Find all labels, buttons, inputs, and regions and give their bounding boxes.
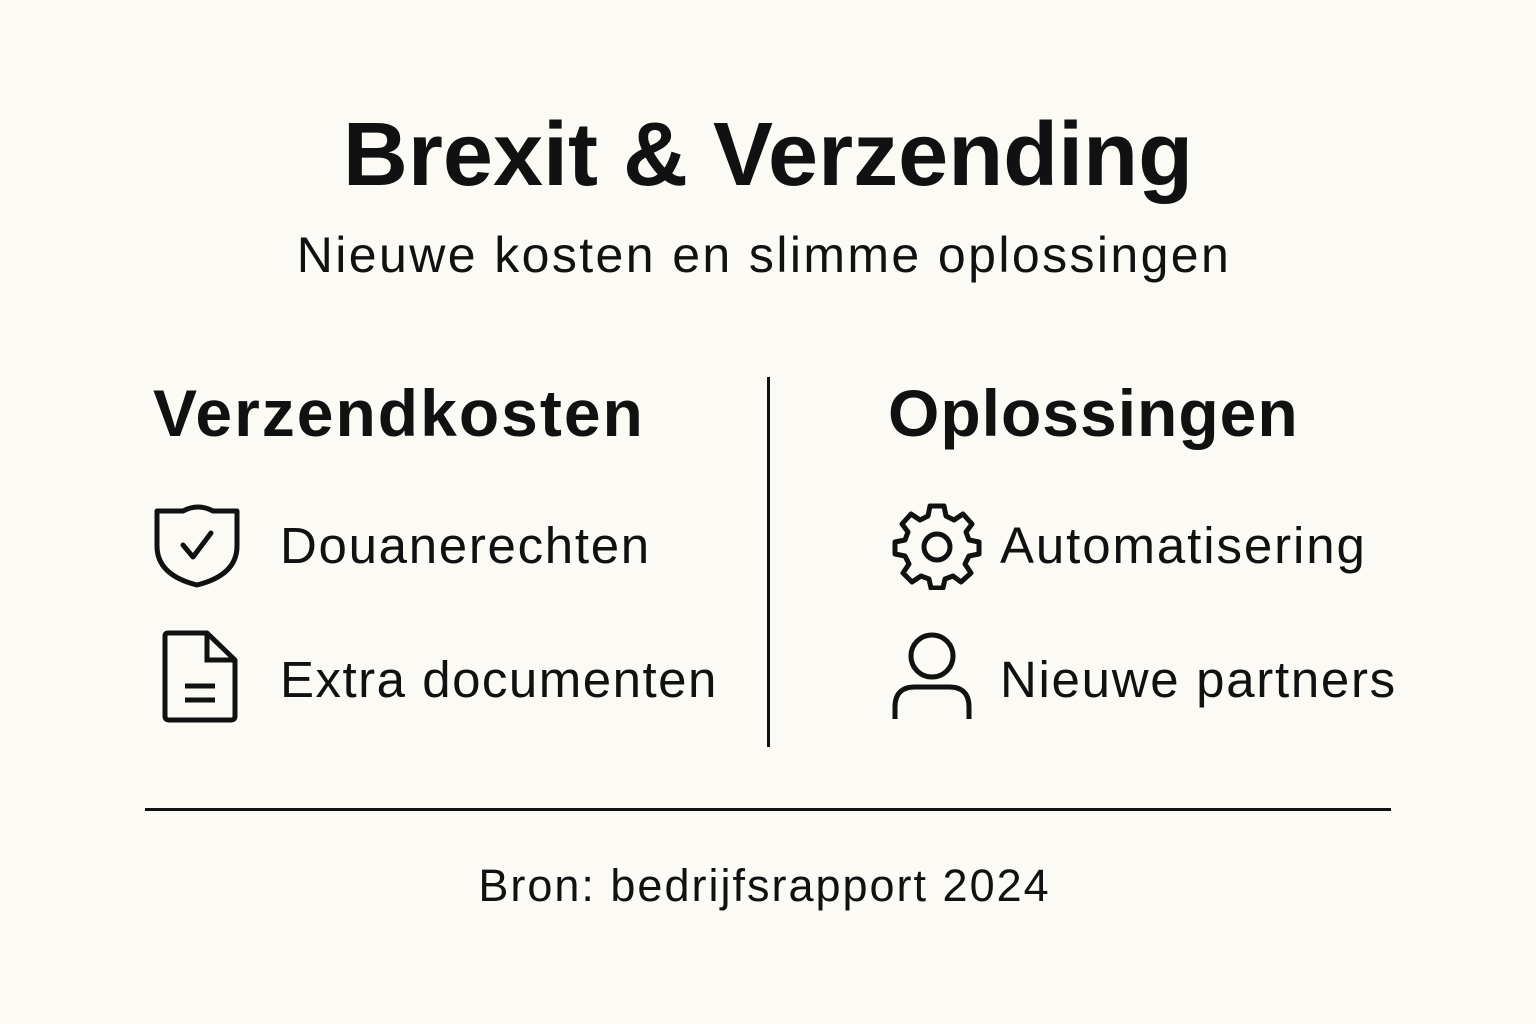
subtitle: Nieuwe kosten en slimme oplossingen	[297, 227, 1231, 283]
text: Douanerechten: Douanerechten	[280, 517, 651, 574]
text: Nieuwe partners: Nieuwe partners	[1000, 651, 1397, 708]
text: Automatisering: Automatisering	[1000, 517, 1367, 574]
heading: Oplossingen: Oplossingen	[888, 376, 1299, 450]
panel: oplossingen	[888, 376, 1397, 719]
title: Brexit & Verzending	[343, 105, 1193, 205]
icon: person	[892, 632, 972, 719]
vertical divider	[767, 377, 770, 747]
heading: Verzendkosten: Verzendkosten	[153, 376, 645, 450]
text: Extra documenten: Extra documenten	[280, 651, 718, 708]
icon: gear	[892, 504, 982, 590]
source note: Bron: bedrijfsrapport 2024	[478, 860, 1051, 911]
icon: shield	[154, 504, 240, 588]
horizontal divider	[145, 808, 1391, 811]
panel: verzendkosten	[153, 376, 718, 722]
icon: document	[162, 630, 238, 722]
